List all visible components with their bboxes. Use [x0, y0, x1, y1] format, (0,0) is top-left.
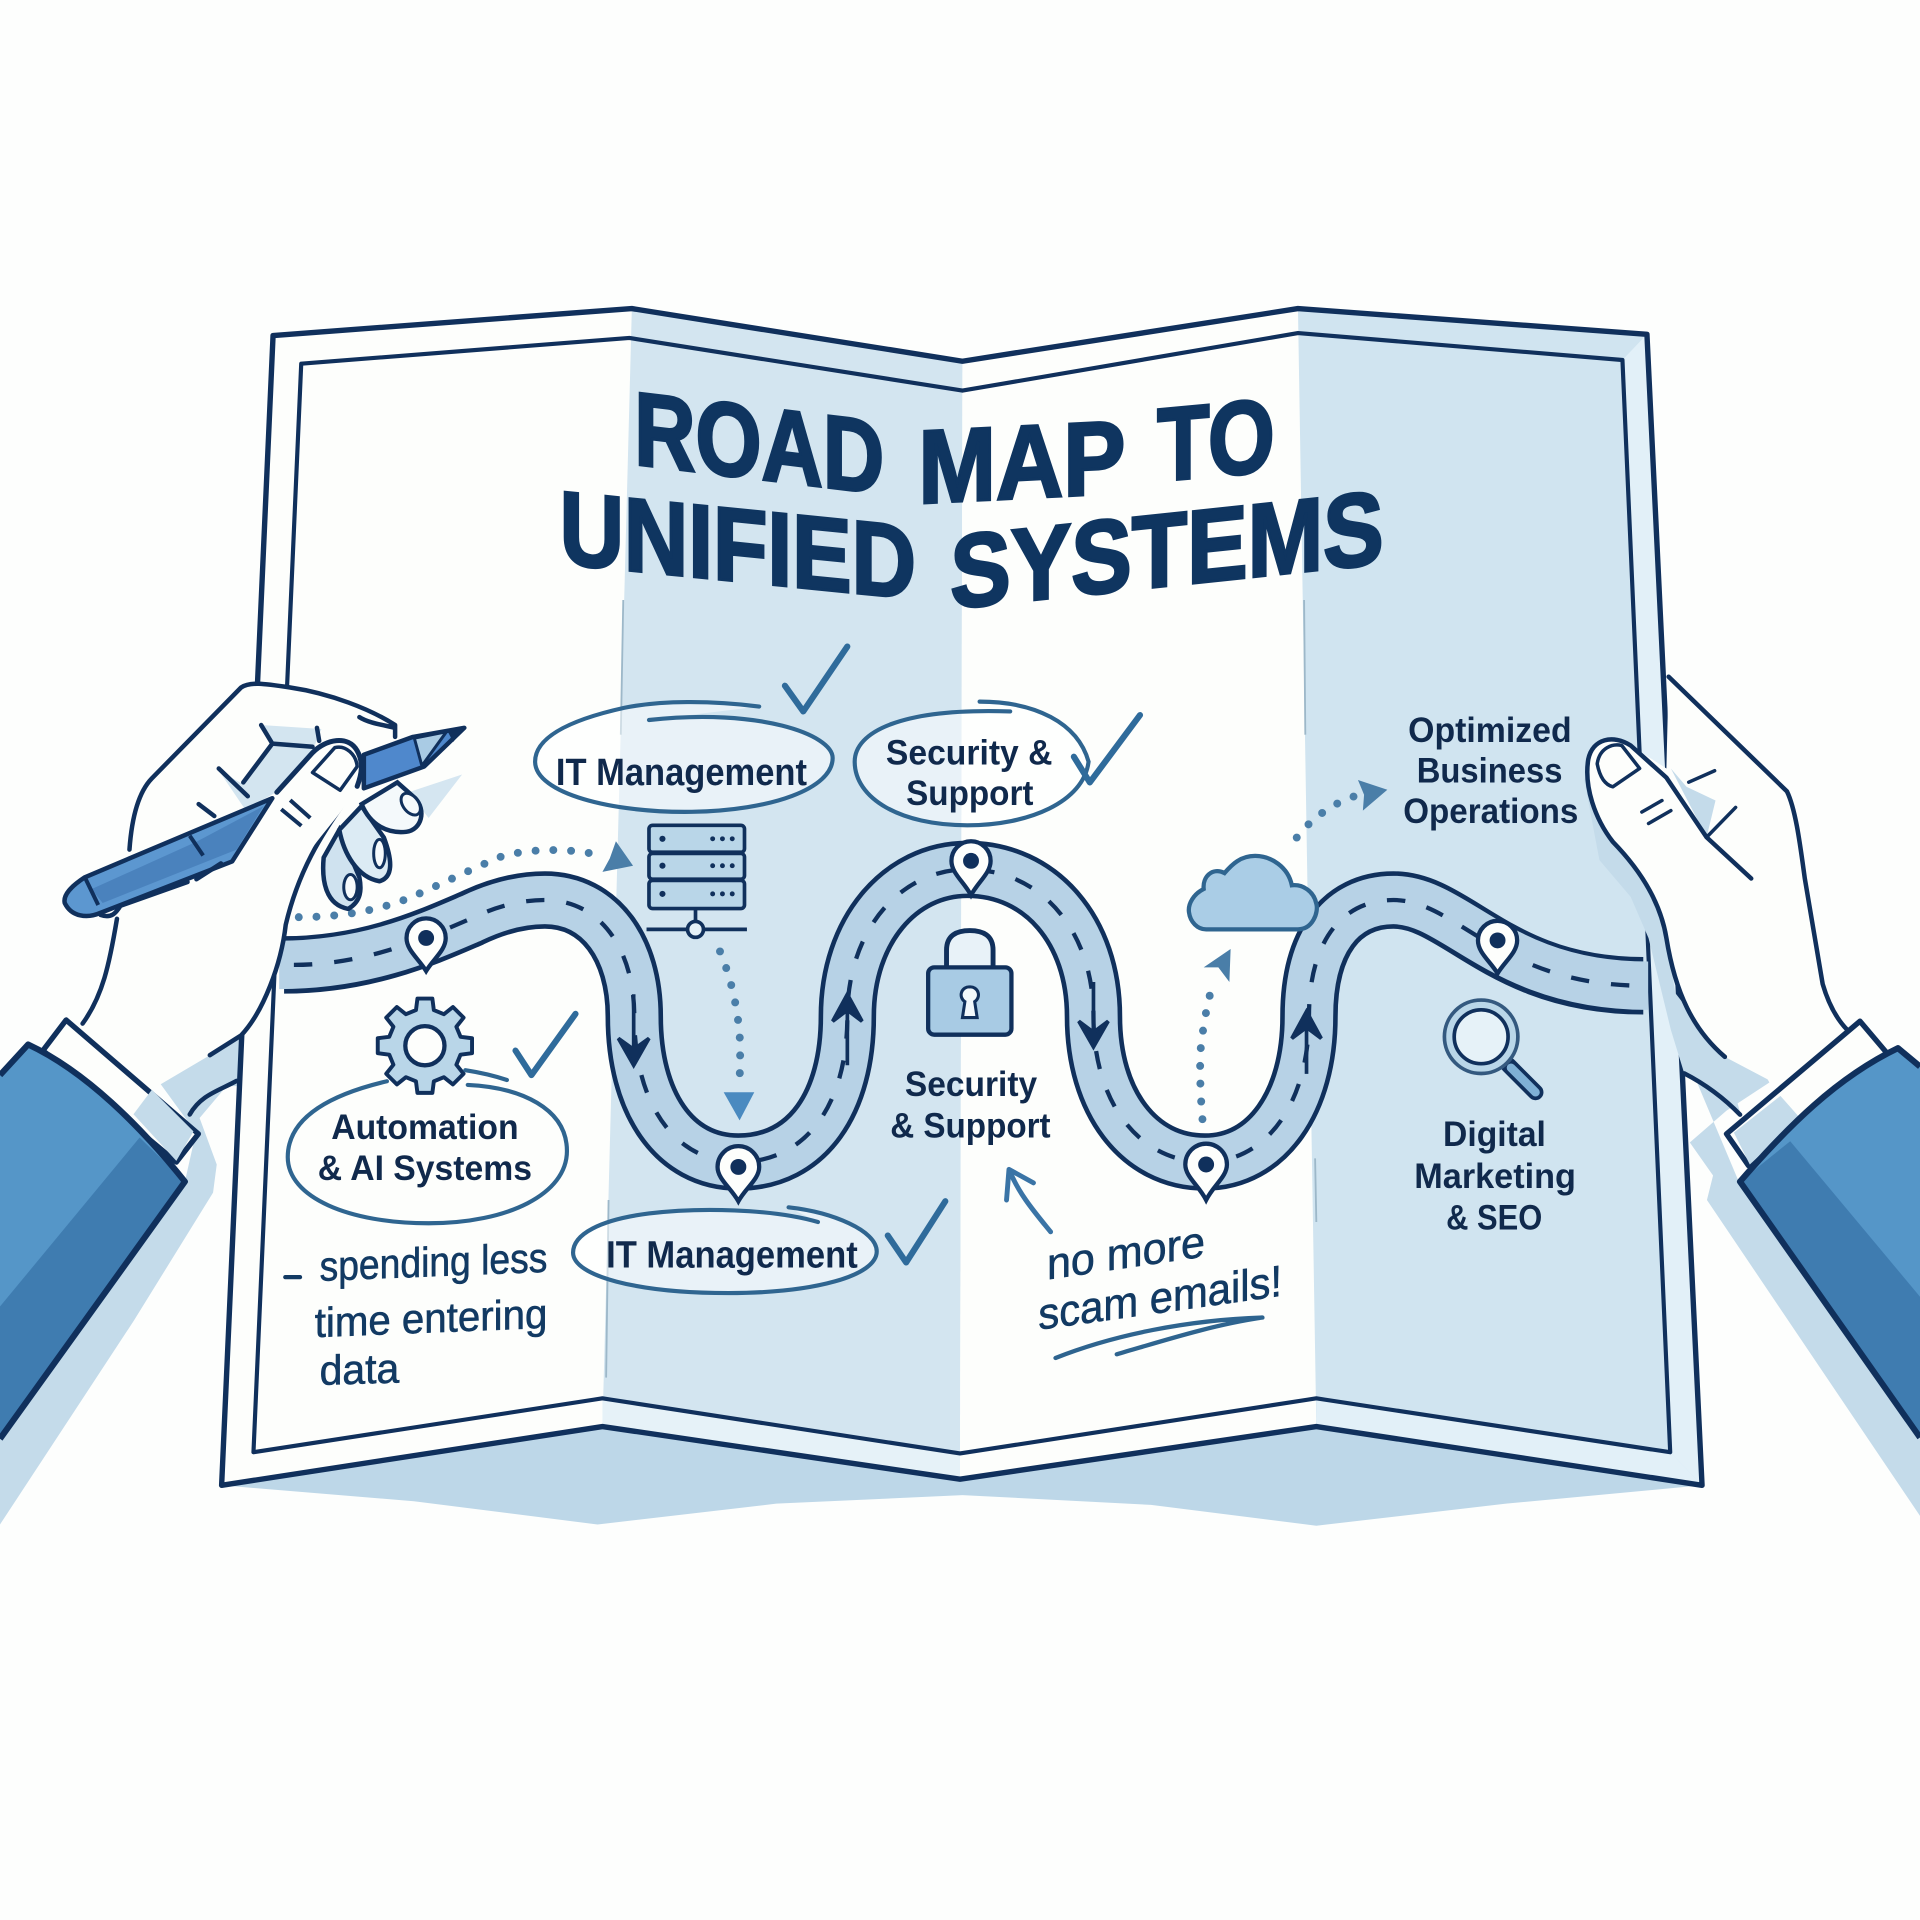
road centre dashes [294, 869, 1643, 1162]
panel 2 [602, 309, 962, 1479]
thumb nail [1597, 745, 1640, 787]
arrowhead to cloud [1204, 949, 1231, 982]
palm shadow patch [1671, 768, 1716, 837]
line 3: & SEO [1446, 1197, 1542, 1237]
oval label: Security and Support top [855, 702, 1089, 825]
oval [288, 1070, 567, 1223]
line 1: no more [1047, 1218, 1205, 1290]
sleeve base [1740, 1048, 1920, 1438]
server node [688, 921, 703, 937]
icon: server [647, 825, 747, 937]
creases [1642, 771, 1736, 837]
road surface [279, 869, 1648, 1162]
check IT Management top [785, 647, 847, 711]
line 2: & Support [890, 1106, 1051, 1146]
dotted arrows [299, 780, 1387, 1232]
label: Security and Support [890, 1064, 1051, 1146]
server rack 1 [649, 825, 744, 852]
oval [855, 702, 1089, 825]
inner outline [253, 333, 1670, 1453]
arrowhead to road [724, 1092, 754, 1120]
pen cone [414, 732, 446, 766]
label: Optimized Business Operations [1403, 710, 1578, 831]
dotted arrow to cloud [1200, 982, 1213, 1119]
thumb shadow [1584, 778, 1740, 1112]
folded road map paper [222, 309, 1702, 1485]
label line 2: & AI Systems [318, 1148, 532, 1188]
sleeve shade [1740, 1141, 1920, 1438]
title word TO: TO [1157, 378, 1275, 504]
dash [285, 1275, 300, 1279]
pen clip [100, 863, 221, 916]
handwritten note: no more scam emails [1038, 1218, 1282, 1358]
left shirt cuff [43, 1020, 198, 1162]
thumb nail [313, 747, 357, 790]
back fingers [219, 725, 321, 810]
dotted arrow to outcome [1297, 796, 1356, 838]
line 2: Business [1417, 750, 1562, 790]
pen lower barrel [64, 798, 272, 916]
dotted arrow to server [299, 850, 602, 917]
road direction arrows [618, 982, 1321, 1074]
arrow down 1 [618, 994, 649, 1065]
cuff [43, 1020, 198, 1162]
panel 4 bottom margin [1316, 1398, 1702, 1485]
right shirt cuff [1727, 1021, 1887, 1166]
server rack 2 [649, 853, 744, 879]
left sleeve [0, 1044, 185, 1439]
line 1: spending less [320, 1234, 547, 1290]
line 2: time entering [315, 1290, 547, 1346]
server rack 3 [649, 880, 744, 909]
label: IT Management [556, 752, 807, 794]
right sleeve [1740, 1048, 1920, 1438]
pen upper barrel [364, 728, 464, 788]
map pins [407, 841, 1517, 1201]
panel 3 [960, 309, 1316, 1479]
pen tip [446, 727, 465, 742]
gear hole [405, 1026, 444, 1065]
arrow up 1 [833, 994, 862, 1065]
server network line [647, 909, 747, 929]
line 1: Optimized [1408, 710, 1572, 750]
check Security and Support [1074, 715, 1140, 782]
line 3: data [320, 1344, 400, 1394]
gear teeth [378, 999, 472, 1093]
cuff [1727, 1021, 1887, 1166]
title word MAP: MAP [918, 400, 1125, 526]
label line 1: Security & [886, 733, 1052, 773]
check Automation [516, 1014, 576, 1075]
arrowhead to outcome [1358, 780, 1387, 811]
arrow up 2 [1292, 1011, 1321, 1074]
pin 5 [1478, 921, 1517, 973]
paper shadow [222, 1420, 1702, 1526]
server lights [659, 836, 735, 897]
handle fill [1511, 1068, 1536, 1092]
finger nails [344, 790, 424, 900]
title word UNIFIED: UNIFIED [560, 470, 916, 622]
panel 1 [222, 309, 632, 1485]
label line 1: Automation [331, 1107, 519, 1147]
checkmarks [516, 647, 1140, 1262]
shackle [947, 931, 993, 967]
keyhole [961, 987, 978, 1018]
line 3: Operations [1403, 791, 1578, 831]
line 1: Digital [1443, 1114, 1546, 1154]
line 2: Marketing [1414, 1156, 1576, 1196]
icon: magnifying glass [1444, 1000, 1536, 1092]
right hand [1584, 677, 1847, 1115]
lens rim [1444, 1000, 1518, 1074]
left arm shadow [0, 853, 312, 1524]
icon: cloud [1189, 856, 1317, 929]
finger 1 [362, 782, 421, 832]
lock body [928, 967, 1011, 1035]
winding road [279, 869, 1648, 1162]
pin 3 [951, 841, 991, 895]
pin 1 [407, 918, 446, 971]
label line 2: Support [906, 773, 1034, 813]
title [560, 370, 1384, 632]
oval label: IT Management top [535, 702, 833, 812]
check IT Management bottom [888, 1201, 945, 1262]
arrow from note [1007, 1169, 1051, 1232]
dotted arrow to road [720, 951, 740, 1087]
arrow down 2 [1079, 982, 1108, 1047]
pin 2 [718, 1146, 759, 1201]
left hand holding pen [64, 684, 465, 1115]
pen highlight [92, 806, 263, 903]
icon: gear [378, 999, 472, 1093]
hand back outline [1669, 677, 1847, 1030]
oval [535, 702, 833, 812]
title word SYSTEMS: SYSTEMS [950, 470, 1384, 632]
right arm shadow [1580, 784, 1920, 1516]
hand fill [67, 684, 395, 1103]
sleeve shade [0, 1138, 185, 1439]
oval [573, 1207, 877, 1293]
underline scribble [1056, 1318, 1262, 1358]
panel 2 bottom margin [602, 1398, 960, 1479]
road edge [284, 869, 1643, 1162]
finger 2 [339, 806, 390, 881]
thumb creases [281, 800, 310, 826]
hand outline [83, 684, 395, 1115]
finger 3 [323, 830, 360, 909]
panel 4 margin [1622, 334, 1702, 1485]
thumb outline [277, 741, 361, 792]
thumb [268, 741, 361, 877]
label: IT Management [606, 1234, 858, 1276]
pin 4 [1185, 1144, 1227, 1200]
cuff shadow [133, 1090, 193, 1161]
cuff shadow [1734, 1096, 1800, 1164]
oval label: IT Management bottom [573, 1207, 877, 1293]
title word ROAD: ROAD [634, 370, 884, 517]
handle [1509, 1065, 1536, 1092]
sleeve outline [1740, 1048, 1920, 1438]
thumb outline [1587, 739, 1751, 1057]
line 1: Security [905, 1064, 1037, 1104]
lens glass [1454, 1010, 1508, 1064]
panel 4 [1298, 309, 1702, 1485]
arrowhead to server [602, 841, 633, 872]
oval label: Automation and AI Systems [288, 1070, 567, 1223]
wrist lower line [1684, 1073, 1740, 1115]
handwritten note: spending less [285, 1234, 547, 1394]
label: Digital Marketing and SEO [1414, 1114, 1576, 1237]
finger lines [199, 725, 319, 816]
sleeve outline [0, 1044, 185, 1439]
line 2: scam emails! [1038, 1257, 1282, 1340]
sleeve base [0, 1044, 185, 1439]
outer outline [222, 309, 1702, 1485]
icon: padlock [928, 931, 1011, 1035]
pale pen shadow [409, 774, 462, 818]
hand fill [1587, 677, 1847, 1087]
pen joints [85, 836, 203, 905]
